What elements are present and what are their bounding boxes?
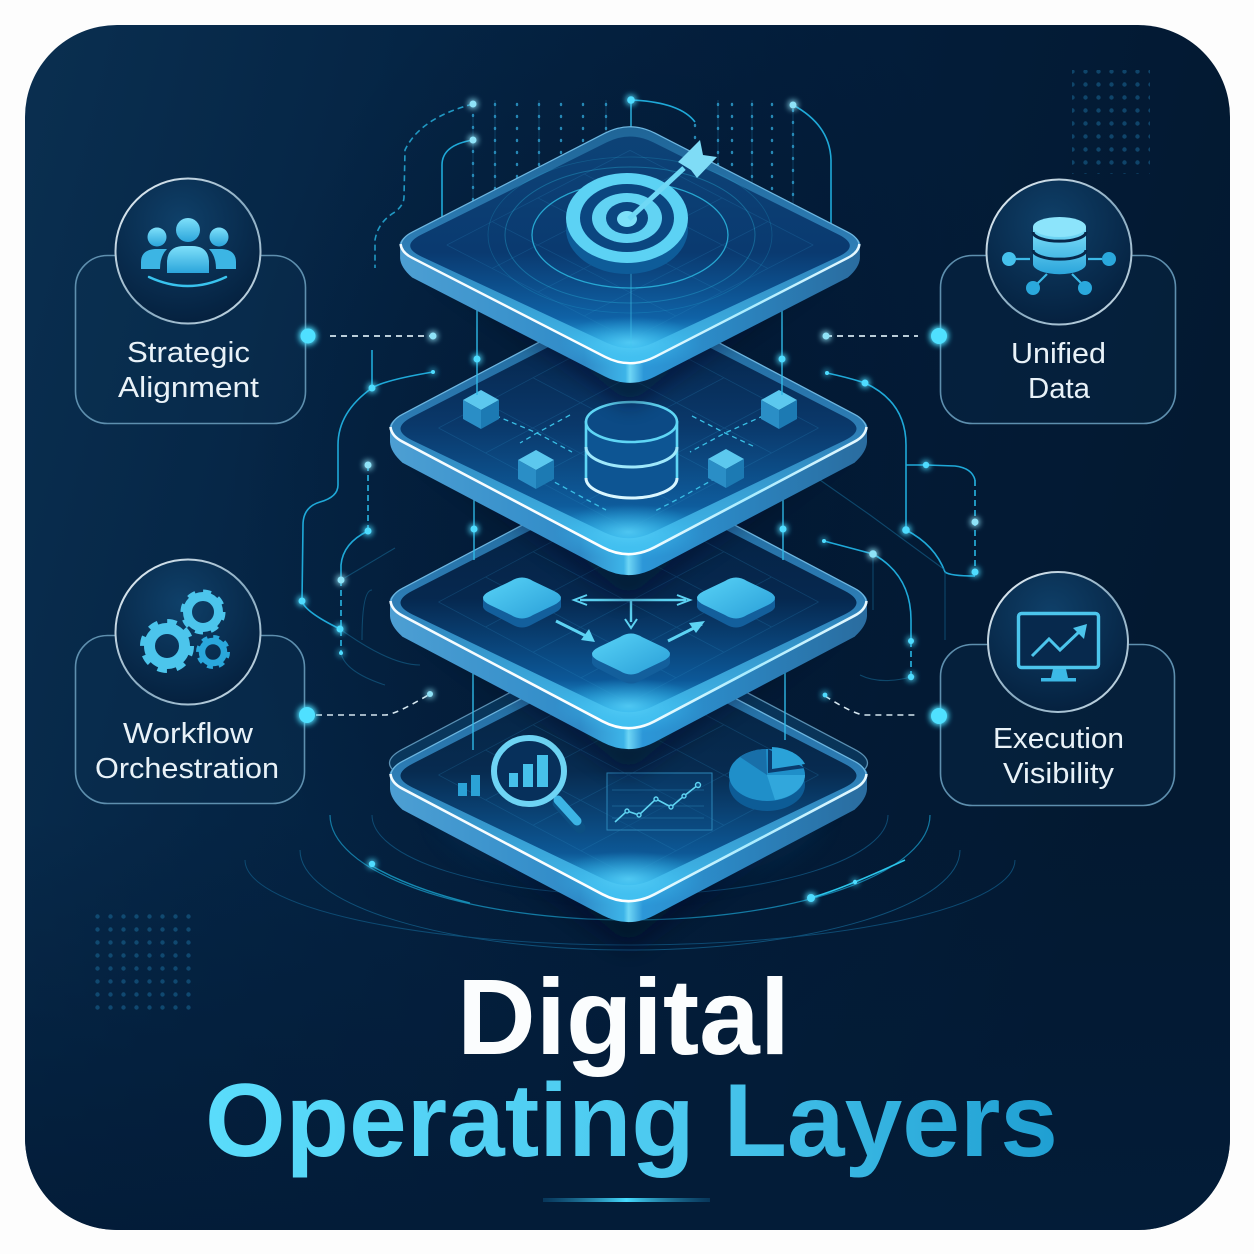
dashed data links	[487, 412, 772, 511]
connector lines: layer 2 to 3	[470, 500, 786, 560]
icon badge: database network	[986, 180, 1132, 324]
icon: target with arrow	[566, 140, 717, 274]
panel text line 2: Data	[1028, 373, 1091, 405]
workflow tile: centre	[592, 634, 670, 684]
icon: small bars	[458, 775, 480, 796]
layer 1: strategy plate	[400, 127, 860, 404]
glow behind the stack	[440, 745, 820, 885]
title: Operating Layers: Operating Layers	[205, 1063, 1058, 1179]
icon badge: gears	[116, 560, 260, 704]
layer 2: data plate	[390, 302, 868, 598]
panel text: Workflow	[123, 718, 254, 750]
flow arrows	[556, 595, 702, 641]
dot grid: bottom left	[90, 912, 195, 1016]
panel: strategic alignment	[76, 178, 306, 424]
icon: magnifier with bars	[494, 738, 580, 828]
icon badge: people	[116, 178, 260, 324]
panel connector nodes	[299, 328, 947, 724]
dot grid: top right	[1072, 70, 1150, 174]
title: Digital: Digital	[457, 956, 790, 1077]
circuit lines: top	[375, 100, 831, 770]
line chart	[607, 773, 712, 830]
panel: unified data	[940, 180, 1176, 424]
layer 3: workflow plate	[390, 476, 868, 772]
cube: back right	[761, 390, 797, 429]
panel: execution visibility	[940, 572, 1174, 806]
workflow tile: right	[697, 578, 775, 628]
panel text: Execution	[993, 723, 1124, 755]
icon badge: monitor with rising chart	[988, 572, 1128, 712]
cube: front right	[708, 449, 744, 488]
panel text line 2: Orchestration	[95, 753, 279, 785]
icon: pie chart	[729, 747, 805, 811]
icon: database cylinder	[586, 402, 677, 498]
connector lines: layer 3 to 4	[473, 668, 785, 750]
circuit lines: right	[820, 336, 975, 715]
flow arrowheads	[581, 621, 705, 642]
ripple rings	[488, 157, 772, 313]
cube: front left	[518, 450, 554, 489]
layer 4: analytics plate	[390, 637, 868, 945]
cube: back left	[463, 390, 499, 429]
panel text line 2: Alignment	[118, 372, 259, 404]
concentric base rings	[245, 815, 1015, 950]
panel text: Unified	[1011, 338, 1106, 370]
connector lines: layer 1 to 2	[474, 305, 786, 395]
circuit lines: left	[302, 336, 433, 715]
panel text: Strategic	[127, 337, 250, 369]
panel text line 2: Visibility	[1003, 758, 1115, 790]
circuit nodes	[298, 96, 978, 902]
title underline	[543, 1198, 710, 1202]
workflow tile: left	[483, 578, 561, 628]
panel: workflow orchestration	[76, 560, 304, 804]
